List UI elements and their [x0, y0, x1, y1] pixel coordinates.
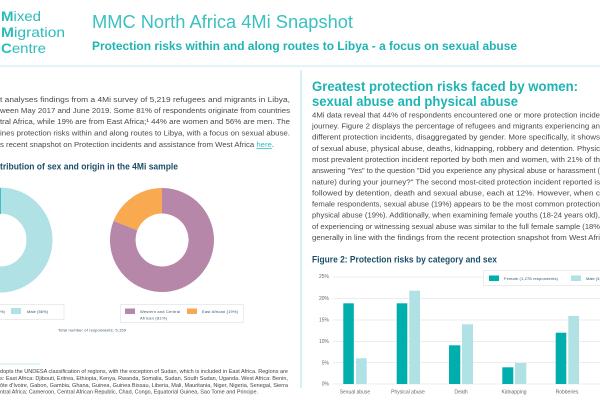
- text block: protection risks findings: [311, 110, 600, 242]
- text block: protection risks findings: generally in line with the findings from the recent protection snapshot from West Afri: [312, 233, 600, 242]
- bar chart: protection risks by category and sex: 0%: [322, 382, 330, 388]
- heading: figure 1: tribution of sex and origin in the 4Mi sample: [0, 162, 178, 172]
- logo: Mixed Migration Centre: Migration: [1, 24, 65, 40]
- bar chart: protection risks by category and sex: 25%: [319, 274, 330, 280]
- legend: origin: [120, 304, 244, 322]
- legend: female and male: [484, 270, 600, 286]
- bar chart: protection risks by category and sex: 10%: [319, 339, 330, 345]
- legend: origin: Western and Central: [140, 309, 180, 314]
- bar chart: protection risks by category and sex: [319, 274, 600, 396]
- logo: Mixed Migration Centre: Centre: [1, 40, 46, 56]
- text block: introduction: t analyses findings from a 4Mi survey of 5,219 refugees and migrants in Libya,: [0, 95, 290, 104]
- heading: greatest protection risks: [312, 79, 578, 109]
- legend: sex: Male (56%): [27, 309, 49, 314]
- logo: Mixed Migration Centre: [1, 8, 65, 56]
- bar chart: protection risks by category and sex: 15%: [319, 318, 330, 324]
- donut chart: origin: [110, 188, 214, 292]
- legend: female and male: Female (1,278 respondents): [504, 276, 559, 281]
- text block: protection risks findings: most prevalent protection incident reported by both men and women, with 21% of th: [312, 155, 600, 164]
- text block: protection risks findings: 4Mi data reveal that 44% of respondents encountered one or more protection incide: [312, 110, 600, 120]
- text block: introduction: tral Africa, while 19% are from East Africa;¹ 44% are women and 56% are men. The: [0, 117, 290, 126]
- text block: protection risks findings: of experiencing or witnessing sexual abuse was similar to the full female sample (18%: [312, 222, 600, 231]
- footnote: [0, 364, 288, 396]
- footnote: dopts the UNDESA classification of regions, with the exception of Sudan, which is included in East Africa. Regions are: [0, 369, 288, 375]
- text block: introduction: [0, 95, 290, 149]
- text block: introduction: s recent snapshot on Protection incidents and assistance from West Africa here.: [0, 140, 274, 149]
- legend: sex: [0, 304, 64, 320]
- text block: protection risks findings: nature) during your journey?" The second most-cited protection incident reported is: [312, 178, 600, 186]
- subtitle: Protection risks within and along routes to Libya - a focus on sexual abuse: [92, 41, 517, 53]
- bar chart: protection risks by category and sex: 5%: [322, 360, 330, 366]
- text block: protection risks findings: female respondents, sexual abuse (19%) appears to be the most common protection: [312, 200, 600, 208]
- bar chart: protection risks by category and sex: Robberies: [556, 390, 579, 396]
- bar chart: protection risks by category and sex: 20%: [319, 296, 330, 302]
- heading: greatest protection risks: Greatest protection risks faced by women:: [312, 79, 578, 94]
- text block: protection risks findings: journey. Figure 2 displays the percentage of refugees and migrants experiencing an: [311, 122, 600, 130]
- text block: protection risks findings: physical abuse (19%). Additionally, when examining female youths (18-24 years old),: [312, 210, 600, 220]
- legend: sex: %): [0, 309, 6, 314]
- bar chart: protection risks by category and sex: Death: [454, 390, 468, 396]
- title: MMC North Africa 4Mi Snapshot: [92, 12, 353, 32]
- text block: protection risks findings: followed by detention, death and sexual abuse, each at 12%. However, when c: [312, 188, 600, 198]
- text block: introduction: ines protection risks within and along routes to Libya, with a focus on sexual abuse.: [0, 128, 290, 138]
- text block: protection risks findings: of sexual abuse, physical abuse, deaths, kidnapping, robbery and detention. Physic: [312, 144, 600, 153]
- legend: origin: East African (19%): [202, 309, 239, 314]
- note: total respondents: Total number of respondents: 5,159: [58, 328, 127, 332]
- footnote: s: East Africa: Djibouti, Eritrea, Ethiopia, Kenya, Rwanda, Somalia, Sudan, South Sudan, Uganda. West Africa: Benin,: [0, 376, 288, 382]
- legend: origin: African (81%): [140, 316, 168, 320]
- footnote: ôte d'Ivoire, Gabon, Gambia, Ghana, Guinea, Guinea Bissau, Liberia, Mali, Mauritania, Niger, Nigeria, Senegal, Sierra: [0, 383, 288, 389]
- heading: figure 2: Figure 2: Protection risks by category and sex: [312, 254, 498, 266]
- heading: greatest protection risks: sexual abuse and physical abuse: [312, 94, 518, 109]
- text block: introduction: ween May 2017 and June 2019. Some 81% of respondents originate from countries: [0, 106, 290, 115]
- bar chart: protection risks by category and sex: Sexual abuse: [340, 390, 370, 396]
- logo: Mixed Migration Centre: Mixed: [1, 8, 41, 24]
- bar chart: protection risks by category and sex: Physical abuse: [391, 390, 425, 396]
- bar chart: protection risks by category and sex: Kidnapping: [501, 390, 527, 396]
- donut chart: sex: [0, 188, 40, 280]
- footnote: ntral Africa: Cameroon, Central African Republic, Chad, Congo, Equatorial Guinea, Sao Tome and Principe.: [0, 390, 258, 396]
- text block: protection risks findings: different protection incidents, disaggregated by gender. More specifically, it shows: [312, 132, 600, 142]
